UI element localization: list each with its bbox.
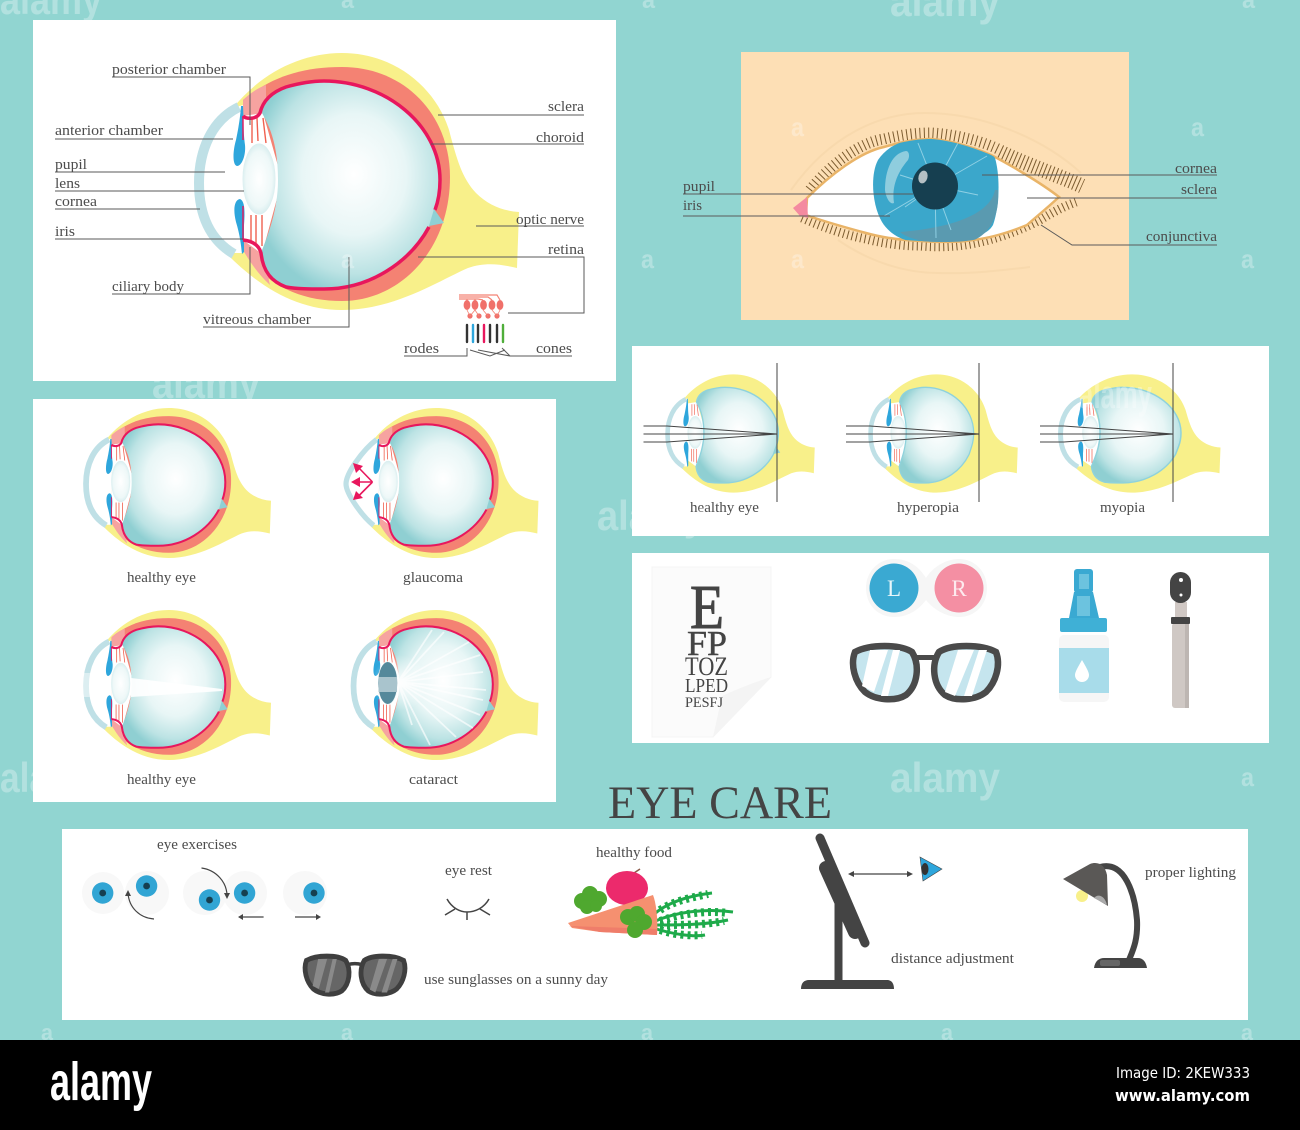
eye chart: E — [690, 574, 724, 642]
panel: eye cross-section anatomy: choroid — [536, 130, 585, 146]
eye chart: FP — [687, 624, 727, 663]
panel: eye cross-section anatomy: iris — [55, 224, 75, 240]
sunglasses: use sunglasses on a sunny day — [424, 972, 609, 988]
panel: eye conditions — [33, 399, 556, 802]
panel: eye cross-section anatomy: ciliary body — [112, 279, 185, 295]
panel: external eye anatomy: sclera — [1181, 182, 1218, 198]
watermarks: a — [41, 244, 54, 274]
glaucoma eye: glaucoma — [403, 570, 464, 586]
panel: eye cross-section anatomy: posterior chamber — [112, 62, 226, 78]
healthy food — [568, 845, 733, 938]
panel: eye cross-section anatomy: optic nerve — [516, 212, 584, 228]
healthy eye: healthy eye — [127, 570, 196, 586]
proper lighting: proper lighting — [1145, 865, 1236, 881]
panel: external eye anatomy: pupil — [683, 179, 715, 195]
panel: eye care tools — [632, 553, 1269, 743]
watermarks: a — [341, 244, 354, 274]
ophthalmoscope — [1170, 572, 1191, 708]
footer bar — [0, 1040, 1300, 1130]
panel: eye cross-section anatomy: cones — [536, 341, 572, 357]
distance adjustment — [801, 838, 1014, 989]
proper lighting — [1063, 863, 1236, 968]
healthy eye refraction — [644, 363, 815, 516]
eye chart: LPED — [685, 675, 728, 697]
iris and pupil — [873, 138, 999, 244]
panel: external eye anatomy: iris — [683, 198, 702, 214]
myopia refraction — [1040, 363, 1220, 516]
cataract eye — [354, 610, 538, 788]
watermarks: alamy — [0, 754, 101, 801]
myopia refraction: myopia — [1100, 500, 1146, 516]
eye chart: PESFJ — [685, 695, 723, 711]
contact lens case — [866, 559, 987, 617]
watermarks: a — [1191, 112, 1204, 142]
watermarks: a — [791, 244, 804, 274]
footer bar: www.alamy.com — [1115, 1086, 1250, 1105]
watermarks: a — [1241, 762, 1254, 792]
healthy eye refraction: healthy eye — [690, 500, 759, 516]
watermarks: a — [1241, 1020, 1254, 1045]
eye exercises: eye exercises — [157, 837, 237, 853]
panel: eye cross-section anatomy: pupil — [55, 157, 87, 173]
watermarks: a — [641, 1020, 654, 1045]
healthy eye — [86, 408, 271, 586]
contact lens case: L — [887, 576, 901, 601]
eye exercises — [82, 837, 327, 920]
eye rest: eye rest — [445, 863, 492, 879]
sunglasses — [305, 956, 609, 994]
watermarks: a — [641, 244, 654, 274]
glaucoma eye — [346, 408, 538, 586]
panel: eye cross-section anatomy: rodes — [404, 341, 439, 357]
panel: external eye anatomy: conjunctiva — [1146, 229, 1218, 245]
watermarks: a — [941, 1020, 954, 1045]
panel: eye cross-section anatomy: cornea — [55, 194, 98, 210]
eye chart: TOZ — [685, 652, 728, 681]
title: EYE CARE — [608, 777, 832, 829]
distance adjustment: distance adjustment — [891, 951, 1014, 967]
panel: external eye anatomy — [683, 52, 1218, 320]
watermarks: alamy — [1079, 373, 1152, 417]
panel: eye cross-section anatomy: vitreous chamber — [203, 312, 311, 328]
eye rest — [445, 863, 492, 920]
panel: external eye anatomy: cornea — [1175, 161, 1218, 177]
healthy eye with light ray — [82, 610, 271, 788]
panel: eye cross-section anatomy: sclera — [548, 99, 585, 115]
panel: eye cross-section anatomy: anterior chamber — [55, 123, 163, 139]
eye drops bottle — [1059, 569, 1109, 702]
contact lens case: R — [951, 576, 967, 601]
watermarks: a — [41, 1020, 54, 1045]
hyperopia refraction: hyperopia — [897, 500, 960, 516]
hyperopia refraction — [846, 363, 1018, 516]
caruncle — [793, 197, 808, 218]
eye chart — [652, 567, 771, 737]
panel: eye cross-section anatomy — [33, 20, 616, 381]
panel: eye care tips — [62, 829, 1248, 1020]
panel: eye cross-section anatomy: lens — [55, 176, 80, 192]
watermarks: alamy — [597, 492, 706, 539]
healthy food: healthy food — [596, 845, 673, 861]
watermarks: a — [1241, 244, 1254, 274]
watermarks: a — [341, 1020, 354, 1045]
watermarks: alamy — [152, 360, 261, 407]
cataract eye: cataract — [409, 772, 458, 788]
eyelashes — [802, 133, 1082, 247]
panel: eye cross-section anatomy: retina — [548, 242, 585, 258]
footer bar: alamy — [50, 1052, 152, 1112]
eyeglasses — [853, 646, 998, 699]
panel: refraction — [632, 346, 1269, 536]
watermarks: a — [791, 112, 804, 142]
watermarks: alamy — [890, 754, 1001, 801]
healthy eye with light ray: healthy eye — [127, 772, 196, 788]
footer bar: Image ID: 2KEW333 — [1116, 1064, 1250, 1082]
retina cell diagram — [459, 295, 503, 342]
